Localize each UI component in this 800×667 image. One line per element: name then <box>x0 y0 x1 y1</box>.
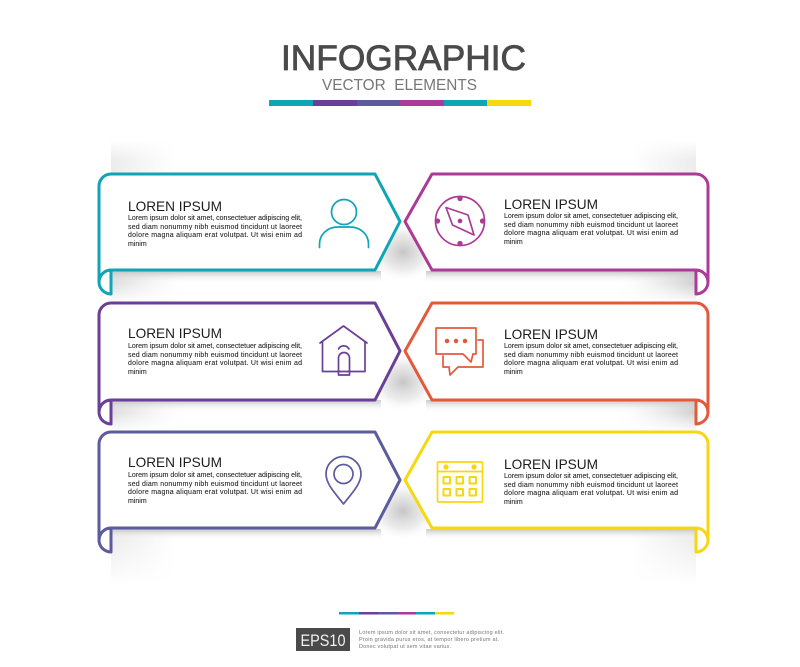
text block: Lorem ipsum dolor sit amet, consectetuer adipiscing elit, <box>504 473 678 480</box>
text block: Lorem ipsum dolor sit amet, consectetuer adipiscing elit, <box>128 472 302 479</box>
icon: home <box>320 326 367 375</box>
text block: minim <box>504 369 523 376</box>
background shadow band <box>111 140 696 585</box>
text block: sed diam nonummy nibh euismod tincidunt ut laoreet <box>504 482 678 489</box>
footer colour bar <box>339 612 454 614</box>
text block <box>504 473 678 506</box>
text block: dolore magna aliquam erat volutpat. Ut wisi enim ad <box>504 490 678 497</box>
text block: sed diam nonummy nibh euismod tincidunt ut laoreet <box>128 224 302 231</box>
text block: dolore magna aliquam erat volutpat. Ut wisi enim ad <box>128 232 302 239</box>
panel: yellow calendar <box>405 432 708 552</box>
text block: sed diam nonummy nibh euismod tincidunt ut laoreet <box>128 352 302 359</box>
text block: Lorem ipsum dolor sit amet, consectetuer adipiscing elit, <box>128 215 302 222</box>
text block <box>504 343 678 376</box>
icon: calendar <box>438 462 482 502</box>
text block: dolore magna aliquam erat volutpat. Ut wisi enim ad <box>128 489 302 496</box>
icon: compass <box>436 196 484 246</box>
footer text <box>359 630 504 650</box>
footer text: Proin gravida purus eros, at tempor libero pretium at. <box>359 637 499 643</box>
heading: LOREN IPSUM <box>504 326 598 342</box>
text block: minim <box>128 498 147 505</box>
text block <box>504 213 678 246</box>
heading: LOREN IPSUM <box>128 325 222 341</box>
text block: Lorem ipsum dolor sit amet, consectetuer adipiscing elit, <box>504 343 678 350</box>
text block: minim <box>128 241 147 248</box>
text block: minim <box>504 499 523 506</box>
panel: slate location <box>99 432 400 552</box>
subtitle: VECTOR ELEMENTS <box>322 77 477 94</box>
text block: dolore magna aliquam erat volutpat. Ut wisi enim ad <box>504 360 678 367</box>
footer text: Lorem ipsum dolor sit amet, consectetur adipiscing elit. <box>359 630 504 636</box>
footer text: Donec volutpat ut sem vitae varius. <box>359 644 451 650</box>
heading: LOREN IPSUM <box>128 198 222 214</box>
panel: magenta compass <box>405 174 708 294</box>
panel: teal person <box>99 174 400 294</box>
EPS10 badge: EPS10 <box>300 631 346 650</box>
text block: minim <box>504 239 523 246</box>
heading: LOREN IPSUM <box>504 456 598 472</box>
heading: LOREN IPSUM <box>128 454 222 470</box>
text block <box>128 472 302 505</box>
text block: sed diam nonummy nibh euismod tincidunt ut laoreet <box>128 481 302 488</box>
text block: Lorem ipsum dolor sit amet, consectetuer adipiscing elit, <box>128 343 302 350</box>
heading: LOREN IPSUM <box>504 196 598 212</box>
text block: sed diam nonummy nibh euismod tincidunt ut laoreet <box>504 222 678 229</box>
icon: chat bubbles <box>436 328 483 375</box>
text block <box>128 215 302 248</box>
icon: location pin <box>326 456 361 504</box>
panel: orange chat <box>405 303 708 424</box>
icon: person <box>320 200 368 248</box>
text block: minim <box>128 369 147 376</box>
text block: dolore magna aliquam erat volutpat. Ut wisi enim ad <box>504 230 678 237</box>
title colour bar <box>269 100 531 106</box>
text block: dolore magna aliquam erat volutpat. Ut wisi enim ad <box>128 360 302 367</box>
title: INFOGRAPHIC <box>281 39 526 78</box>
text block <box>128 343 302 376</box>
panel: purple home <box>99 303 400 424</box>
text block: sed diam nonummy nibh euismod tincidunt ut laoreet <box>504 352 678 359</box>
text block: Lorem ipsum dolor sit amet, consectetuer adipiscing elit, <box>504 213 678 220</box>
